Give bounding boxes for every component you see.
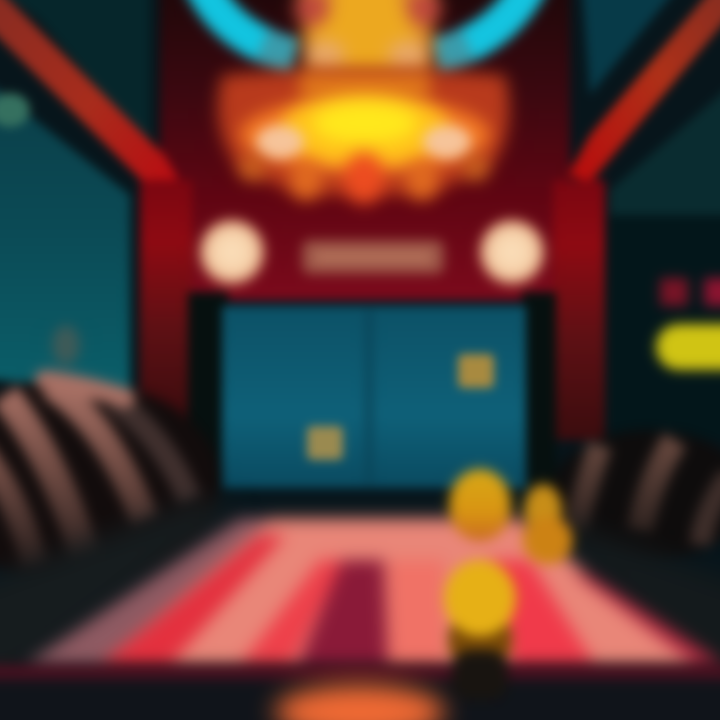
floor shadows (0, 500, 720, 680)
red roof beams (0, 0, 720, 204)
icon: yellow character back right (523, 484, 573, 564)
barrels right (550, 430, 720, 560)
lamp left (199, 219, 265, 285)
orange floor glow (275, 684, 445, 720)
sign plate (302, 240, 444, 274)
marquee bulbs (239, 152, 489, 204)
icon: yellow character back left (449, 469, 511, 541)
lamp right (479, 219, 545, 285)
red pillars (140, 180, 605, 440)
panel: left teal wall (0, 0, 150, 395)
barrels left (0, 325, 220, 580)
marquee: glowing crown base (218, 68, 509, 204)
striped floor (25, 518, 720, 665)
crown top (294, 0, 442, 76)
panel: blue double door (222, 306, 526, 488)
panel: central maroon arch (160, 0, 570, 300)
stage front edge (0, 665, 720, 720)
neon sign right (656, 278, 720, 370)
dark gaps beside door (188, 292, 556, 487)
icon: cyan wings (200, 0, 532, 56)
panel: right dark wall (580, 0, 720, 440)
icon: yellow character front (444, 560, 516, 700)
door ornaments (307, 354, 494, 460)
